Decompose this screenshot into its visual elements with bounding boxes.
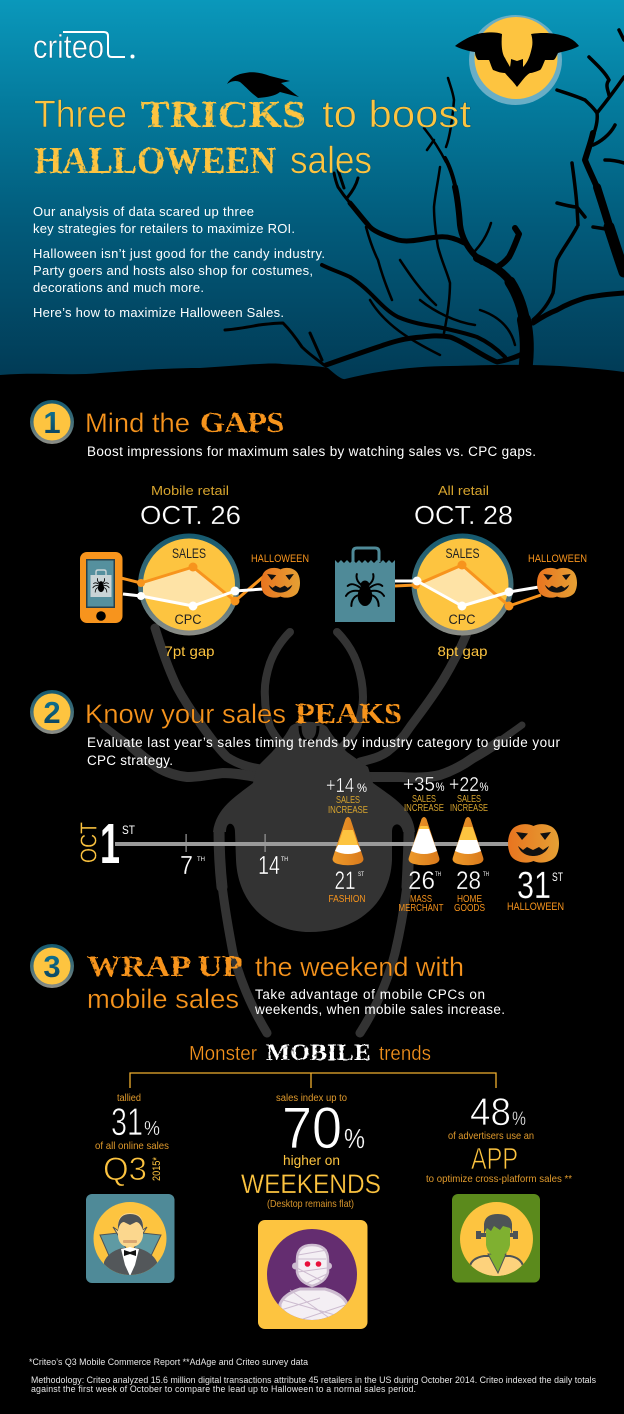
chart heading xyxy=(414,483,513,530)
number badge 3: 3 xyxy=(43,949,61,984)
labels: SALES xyxy=(446,546,480,561)
methodology: Methodology: Criteo analyzed 15.6 million digital transactions attribute 45 retailers in the US during October 2014. Criteo indexed the daily totals xyxy=(31,1375,597,1385)
caption xyxy=(404,794,444,814)
peak: fashion +14% xyxy=(326,775,368,905)
monster mobile trends heading: Monster xyxy=(189,1043,257,1065)
icon: candy corn cone xyxy=(409,817,439,865)
category: MERCHANT xyxy=(398,903,444,914)
title: TRICKS xyxy=(141,94,306,136)
subheading 2: Evaluate last year’s sales timing trends by industry category to guide your xyxy=(87,735,560,750)
icon: moon xyxy=(469,15,562,105)
number badge 3 xyxy=(30,944,74,988)
background spider xyxy=(103,628,522,1033)
category xyxy=(454,894,485,914)
labels: SALES xyxy=(172,546,206,561)
halloween label: HALLOWEEN xyxy=(528,553,587,565)
timeline xyxy=(76,774,564,914)
section 3: Wrap up the weekend xyxy=(30,944,572,1329)
peak: mass merchant +35% xyxy=(398,774,445,914)
labels: CPC xyxy=(448,612,476,627)
icon: pumpkin xyxy=(537,568,577,598)
heading 2 xyxy=(85,699,402,730)
chart: all retail xyxy=(335,483,587,659)
icon: shopping bag with spider xyxy=(335,548,395,622)
column: 31% xyxy=(86,1093,174,1283)
methodology: against the first week of October to compare the lead up to Halloween to a normal sales period. xyxy=(31,1384,416,1394)
sales and cpc lines xyxy=(121,562,263,610)
subheading 1: Boost impressions for maximum sales by watching sales vs. CPC gaps. xyxy=(87,444,536,459)
date: 26 xyxy=(408,867,435,895)
gap label: 8pt gap xyxy=(438,643,488,659)
labels xyxy=(172,546,206,627)
section 2: Know your sales peaks xyxy=(30,690,564,914)
column: 70% xyxy=(241,1093,381,1329)
caption: SALES xyxy=(412,794,436,805)
icon: bat xyxy=(455,32,579,87)
chart heading xyxy=(140,483,241,530)
footnotes xyxy=(29,1357,597,1394)
subheading 3: weekends, when mobile sales increase. xyxy=(254,1002,505,1017)
sales and cpc lines xyxy=(394,560,541,610)
intro text: Here’s how to maximize Halloween Sales. xyxy=(33,305,284,320)
icon: phone xyxy=(80,552,122,623)
date: TH xyxy=(483,871,489,878)
weekends: WEEKENDS xyxy=(241,1169,381,1199)
chart: mobile retail xyxy=(80,483,309,659)
chart heading: OCT. 28 xyxy=(414,500,513,530)
category: GOODS xyxy=(454,903,485,914)
intro text: key strategies for retailers to maximize ROI. xyxy=(33,221,295,236)
intro: sales index up to xyxy=(276,1093,347,1104)
gap label: 7pt gap xyxy=(164,643,215,659)
icon: tree silhouettes xyxy=(225,30,624,372)
category: FASHION xyxy=(328,894,366,905)
heading 3 xyxy=(87,950,464,1014)
date: 7th xyxy=(180,850,205,880)
logo: criteo: criteo xyxy=(33,28,104,65)
heading 3: the weekend with xyxy=(255,952,464,982)
higher on: higher on xyxy=(283,1152,340,1168)
intro text: decorations and much more. xyxy=(33,280,204,295)
chart heading: Mobile retail xyxy=(151,483,229,498)
stat 48%: 48 xyxy=(470,1091,511,1134)
title: Three xyxy=(34,94,127,136)
q3 2015: Q3 xyxy=(103,1151,147,1187)
date: ST xyxy=(358,871,364,878)
date: 1st: 1 xyxy=(100,812,120,876)
category xyxy=(398,894,444,914)
icon: frankenstein card xyxy=(452,1194,540,1282)
methodology xyxy=(31,1375,597,1394)
date: 31st: ST xyxy=(552,870,563,884)
caption: INCREASE xyxy=(450,803,488,814)
section 1: Mind the gaps xyxy=(30,400,587,659)
labels xyxy=(446,546,480,627)
labels: CPC xyxy=(174,612,202,627)
title: sales xyxy=(290,140,372,182)
title: HALLOWEEN xyxy=(34,140,276,182)
stat: +14 xyxy=(326,775,354,797)
number badge 1: 1 xyxy=(43,405,61,440)
icon: candy corn cone xyxy=(453,817,483,865)
monster mobile trends heading: trends xyxy=(379,1043,431,1065)
caption: of all online sales xyxy=(95,1140,169,1152)
chart heading: All retail xyxy=(438,483,489,498)
intro text: Halloween isn’t just good for the candy industry. xyxy=(33,246,325,261)
ground silhouette xyxy=(0,363,624,410)
icon: vampire card xyxy=(86,1194,174,1283)
app: APP xyxy=(471,1141,518,1176)
oct label: OCT xyxy=(76,822,102,863)
category: MASS xyxy=(410,894,432,905)
date: 14th: 14 xyxy=(258,850,280,880)
stat 70%: 70 xyxy=(282,1096,342,1161)
intro text: Our analysis of data scared up three xyxy=(33,204,254,219)
halloween label: HALLOWEEN xyxy=(251,553,309,565)
date: 14th: TH xyxy=(281,856,288,863)
caption: SALES xyxy=(336,795,360,806)
heading 2: Know your sales xyxy=(85,699,286,729)
heading 2: PEAKS xyxy=(295,699,402,730)
cross platform caption: to optimize cross-platform sales ** xyxy=(426,1173,572,1185)
stat: % xyxy=(357,781,367,795)
subheading 3: Take advantage of mobile CPCs on xyxy=(255,987,485,1002)
date: 28 xyxy=(456,867,481,895)
date: 21 xyxy=(334,867,356,895)
stat 31%: 31 xyxy=(111,1101,143,1144)
number badge 1 xyxy=(30,400,74,444)
date: 1st: ST xyxy=(122,823,136,837)
caption xyxy=(450,794,488,814)
date: TH xyxy=(435,871,441,878)
caption: INCREASE xyxy=(328,805,368,816)
hero panel xyxy=(0,0,624,410)
heading 1: GAPS xyxy=(200,408,284,439)
heading 1 xyxy=(85,408,284,439)
subheading 2: CPC strategy. xyxy=(87,753,173,768)
chart heading: OCT. 26 xyxy=(140,500,241,530)
heading 3: WRAP UP xyxy=(87,950,243,983)
icon: halloween pumpkin xyxy=(508,824,559,863)
date: 31st: 31 xyxy=(517,865,551,907)
monster mobile trends heading xyxy=(189,1040,431,1065)
heading 3: mobile sales xyxy=(87,984,239,1014)
category: HOME xyxy=(457,894,482,905)
timeline axis xyxy=(115,834,511,852)
title xyxy=(34,94,471,182)
intro text xyxy=(33,204,325,320)
icon: candy corn cone xyxy=(333,817,363,865)
stat: +22 xyxy=(449,774,479,796)
caption xyxy=(328,795,368,816)
stat: % xyxy=(480,780,489,794)
gauge circle xyxy=(412,534,514,636)
bracket connector xyxy=(130,1073,496,1088)
caption: SALES xyxy=(457,794,481,805)
icon: raven xyxy=(227,72,299,98)
stat: +35 xyxy=(403,774,435,796)
monster mobile trends heading: MOBILE xyxy=(266,1040,371,1065)
date: 7th: 7 xyxy=(180,850,193,880)
caption: INCREASE xyxy=(404,803,444,814)
stat 31%: % xyxy=(144,1118,160,1140)
number badge 2: 2 xyxy=(43,695,61,730)
desktop note: (Desktop remains flat) xyxy=(267,1198,354,1210)
stat 48%: % xyxy=(512,1109,526,1130)
subheading 2 xyxy=(87,735,560,768)
caption: of advertisers use an xyxy=(448,1130,534,1142)
sky gradient xyxy=(0,0,624,400)
gauge circle xyxy=(138,534,240,636)
icon: mummy card xyxy=(258,1220,368,1329)
column: 48% xyxy=(426,1091,572,1282)
tallied: tallied xyxy=(117,1093,141,1104)
stat: % xyxy=(436,780,445,794)
intro text: Party goers and hosts also shop for costumes, xyxy=(33,263,313,278)
q3 2015: 2015* xyxy=(151,1156,163,1181)
peak: home goods +22% xyxy=(449,774,489,914)
halloween label: HALLOWEEN xyxy=(507,901,564,913)
subheading 3 xyxy=(254,987,505,1017)
sources: *Criteo’s Q3 Mobile Commerce Report **AdAge and Criteo survey data xyxy=(29,1357,308,1367)
stat 70%: % xyxy=(344,1123,365,1154)
number badge 2 xyxy=(30,690,74,734)
icon: pumpkin xyxy=(261,568,300,598)
date: 7th: TH xyxy=(197,856,205,863)
title: to boost xyxy=(322,94,471,136)
heading 1: Mind the xyxy=(85,408,190,438)
